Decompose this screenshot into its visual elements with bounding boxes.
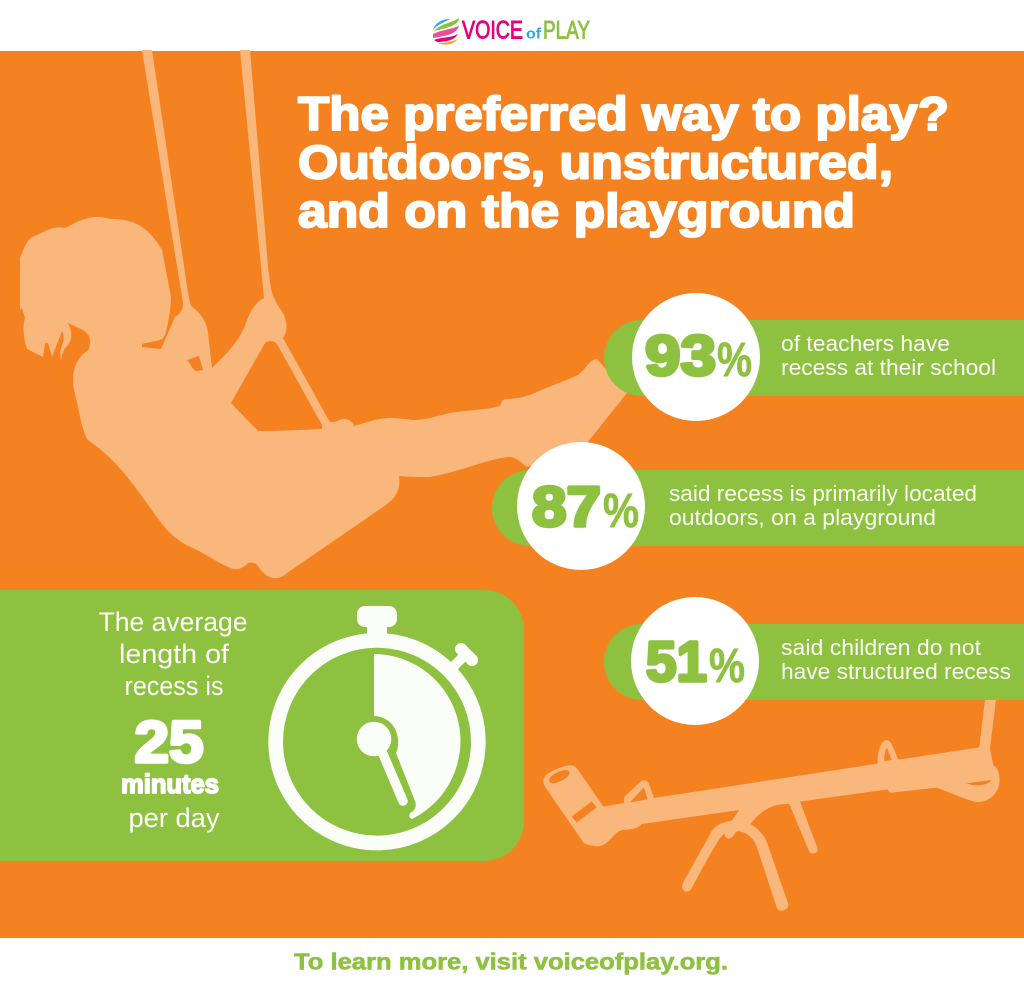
stat: 51%: %: [709, 640, 745, 693]
illustration: girl on swing: [20, 50, 627, 578]
stat: 93%: %: [717, 334, 752, 387]
stat: 93%: [604, 293, 1024, 421]
stat: 93%: 93: [645, 324, 716, 388]
stat: 87%: %: [603, 485, 639, 538]
logo wordmark: VOICE: [462, 16, 523, 44]
average recess text: length of: [119, 639, 230, 669]
heading: Outdoors, unstructured,: [298, 136, 893, 188]
icon: stopwatch: [276, 606, 478, 843]
stat: 87%: said recess is primarily located: [669, 481, 977, 506]
panel: average recess length: [0, 590, 524, 861]
heading: [298, 87, 949, 237]
stat: 51%: said children do not: [781, 635, 981, 660]
stat: 87%: [492, 442, 1024, 570]
average recess text: 25: [134, 710, 204, 775]
logo: Voice of Play: [433, 16, 590, 45]
heading: The preferred way to play?: [298, 87, 949, 140]
stat: 93%: of teachers have: [781, 331, 950, 356]
average recess text: recess is: [124, 671, 224, 701]
icon: logo globe: [433, 18, 459, 45]
footer call to action: To learn more, visit voiceofplay.org.: [294, 948, 728, 974]
heading: and on the playground: [298, 184, 855, 237]
stat: 51%: [604, 597, 1024, 725]
illustration: seesaw: [543, 700, 1000, 911]
stat: 51%: 51: [646, 630, 707, 694]
average recess text: The average: [98, 607, 248, 637]
stat: 87%: 87: [532, 475, 601, 539]
average recess text: minutes: [121, 769, 219, 799]
average recess text: per day: [128, 803, 220, 833]
stat: 87%: outdoors, on a playground: [669, 505, 936, 530]
logo: Voice of Play: of: [526, 26, 542, 42]
logo: Voice of Play: PLAY: [543, 16, 590, 44]
average recess text: [98, 607, 248, 833]
stat: 51%: have structured recess: [781, 659, 1011, 684]
stat: 93%: recess at their school: [781, 355, 996, 380]
